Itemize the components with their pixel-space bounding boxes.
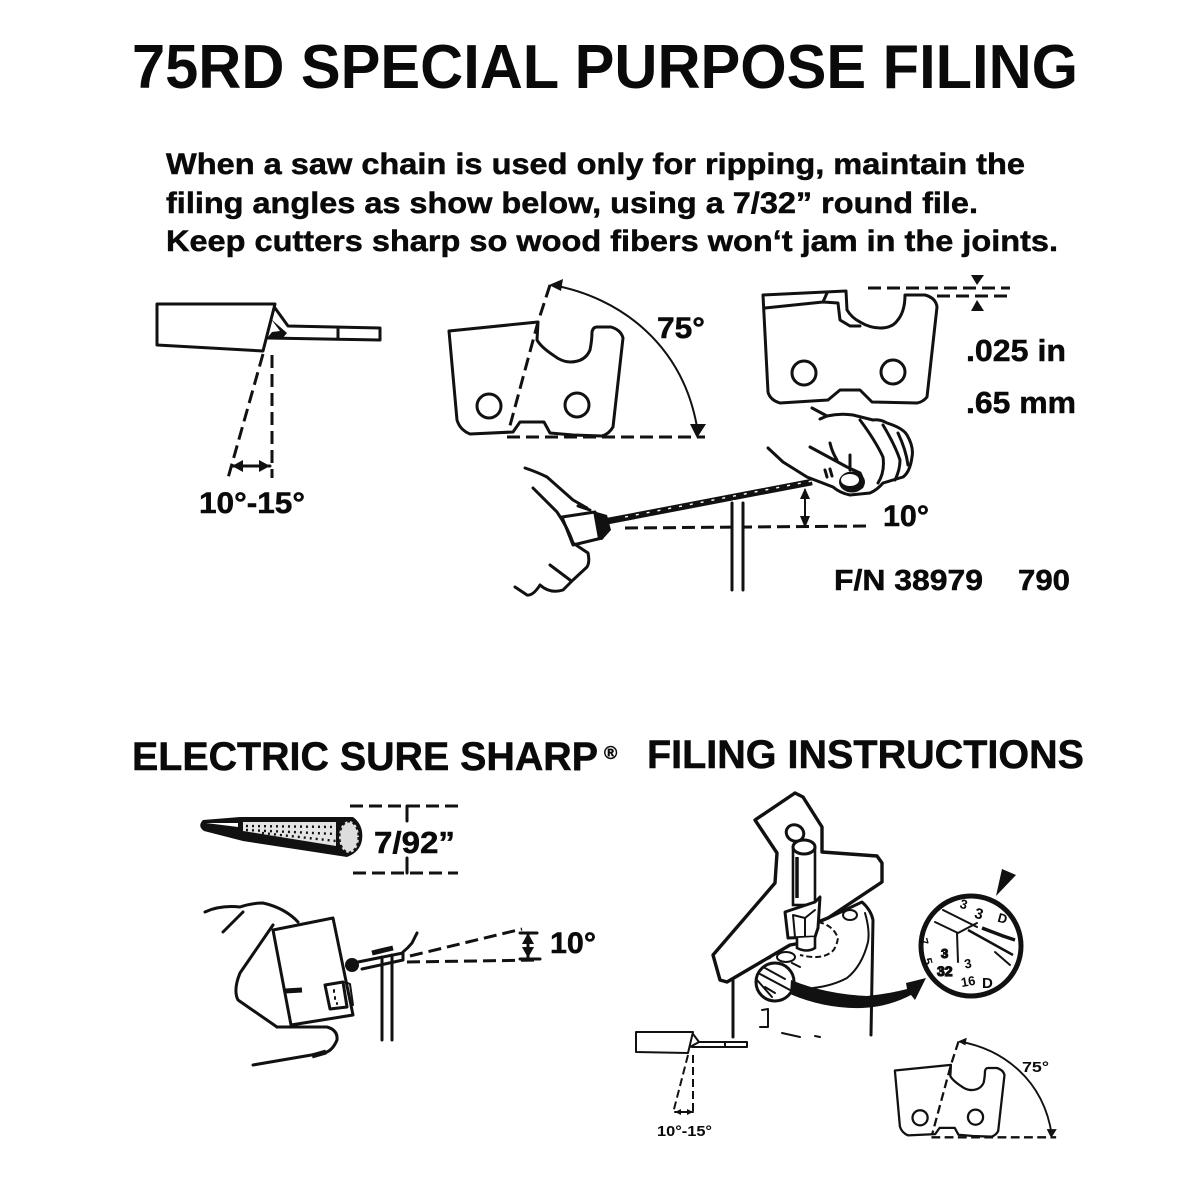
icon: magnified gauge scale: 3 xyxy=(958,896,969,912)
icon: magnified gauge scale: D xyxy=(982,975,993,992)
label: 10-15 degrees: 10°-15° xyxy=(199,487,305,520)
diagram: hand holding electric sharpener xyxy=(205,903,596,1065)
heading: electric sure sharp: ® xyxy=(604,743,617,763)
text block: ripping instructions xyxy=(166,148,1058,258)
date code: 790 xyxy=(1018,565,1070,597)
icon: magnified gauge scale: 16 xyxy=(960,973,977,990)
icon: magnified gauge scale: D xyxy=(996,910,1009,927)
text block: ripping instructions: When a saw chain is used only for ripping, maintain the xyxy=(166,148,1025,181)
icon: magnified gauge scale: 3 xyxy=(941,946,948,961)
diagram: hands holding round file at 10 degrees xyxy=(515,408,929,595)
label: 75 degrees: 75° xyxy=(657,312,705,345)
label: small 10-15 degrees: 10°-15° xyxy=(657,1123,712,1140)
diagram: file angle 10-15 degrees xyxy=(157,304,380,520)
diagram: sharpener guide plate and body xyxy=(713,793,882,1037)
heading: electric sure sharp: ELECTRIC SURE SHARP xyxy=(132,735,598,779)
icon: magnified gauge scale: 3 xyxy=(963,956,973,972)
label: 7/92 inch: 7/92” xyxy=(374,825,455,860)
icon: magnified gauge scale xyxy=(916,896,1021,996)
label: depth .025 in: .025 in xyxy=(966,333,1066,368)
diagram: small chain cutter 75 degrees xyxy=(895,1038,1057,1138)
diagram: small file angle xyxy=(636,1032,747,1140)
arrow: to magnified scale xyxy=(790,978,926,1008)
icon: grinding stone with 7/92 inch size xyxy=(200,806,458,873)
label: small 75 degrees: 75° xyxy=(1022,1059,1049,1076)
label: 10 degrees: 10° xyxy=(550,927,596,960)
text block: ripping instructions: filing angles as show below, using a 7/32” round file. xyxy=(166,187,978,220)
icon: magnified gauge scale: 7 xyxy=(916,937,932,947)
icon: pointer above scale xyxy=(996,869,1016,896)
icon: magnified gauge scale: 5 xyxy=(920,956,936,967)
label: depth .65 mm: .65 mm xyxy=(966,385,1076,420)
icon: magnified gauge scale: 32 xyxy=(937,963,953,979)
label: 10 degrees: 10° xyxy=(883,500,929,533)
icon: magnified gauge scale: 3 xyxy=(973,905,985,924)
part number: F/N 38979 xyxy=(834,565,983,597)
diagram: depth gauge cutter xyxy=(763,275,1010,403)
title: 75RD SPECIAL PURPOSE FILING xyxy=(132,33,1078,102)
heading: filing instructions: FILING INSTRUCTIONS xyxy=(647,733,1084,777)
diagram: chain cutter with 75 degree angle xyxy=(449,279,706,438)
text block: ripping instructions: Keep cutters sharp so wood fibers won‘t jam in the joints. xyxy=(166,225,1058,258)
